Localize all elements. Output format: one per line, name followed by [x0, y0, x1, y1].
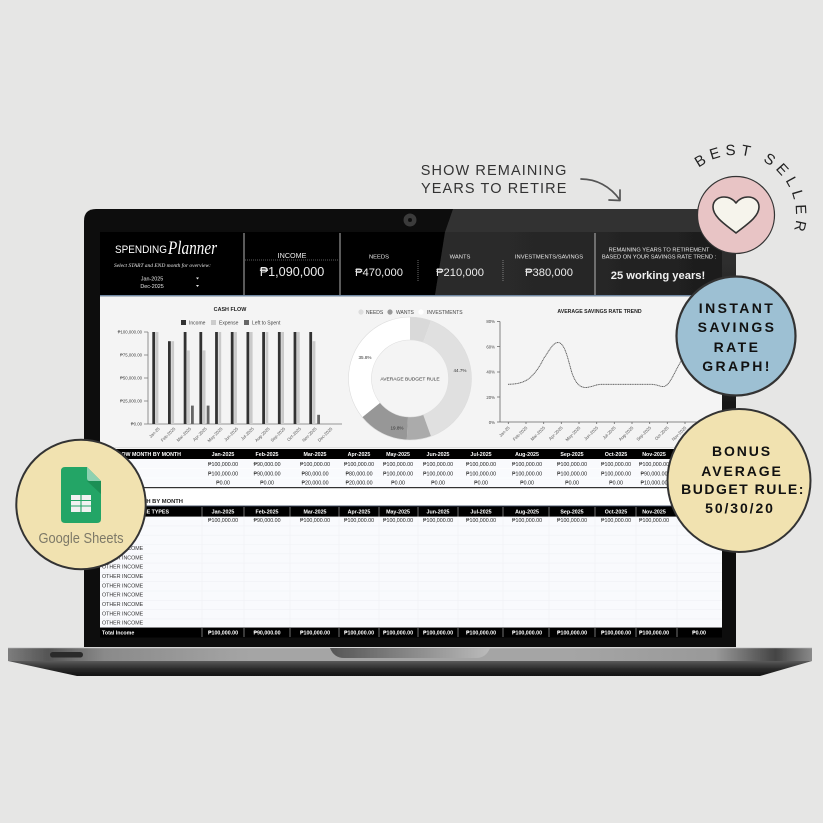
y axis labels: ₱25,000.00 — [120, 398, 143, 404]
table header row: CASH FLOW MONTH BY MONTH — [98, 452, 181, 458]
stat: income: ₱1,090,000 — [260, 265, 324, 279]
badge: instant savings rate graph: INSTANT — [699, 300, 775, 316]
x axis labels: Aug-2025 — [254, 426, 271, 443]
income row: ₱100,000.00 — [639, 462, 669, 468]
stat: investments and savings: INVESTMENTS/SAVINGS — [515, 254, 583, 260]
savings rate line — [508, 340, 694, 388]
first income row: ₱100,000.00 — [208, 518, 238, 524]
laptop lid bezel — [84, 209, 736, 647]
first income row: ₱90,000.00 — [253, 518, 281, 524]
badge: bonus average budget rule — [668, 409, 810, 552]
x axis labels: Jun-2025 — [223, 426, 240, 442]
badge: bonus average budget rule: AVERAGE — [701, 463, 783, 479]
cash flow legend — [181, 320, 281, 326]
stat: wants: ₱210,000 — [436, 267, 484, 279]
y axis labels: ₱100,000.00 — [118, 330, 143, 335]
income row: ₱90,000.00 — [253, 462, 281, 468]
x axis labels: Apr-2025 — [192, 426, 208, 442]
table header row: Jun-2025 — [427, 452, 450, 458]
badge: instant savings rate graph — [676, 276, 796, 396]
total income row: ₱100,000.00 — [512, 630, 542, 636]
badge: bonus average budget rule: BONUS — [712, 443, 772, 459]
badge: best seller — [694, 144, 806, 254]
total income row: ₱100,000.00 — [639, 630, 669, 636]
left to spend row: ₱0.00 — [565, 480, 579, 486]
y axis labels — [486, 319, 495, 425]
x axis labels: Nov-2025 — [301, 426, 318, 443]
badge: bonus average budget rule: BUDGET RULE: — [681, 481, 805, 497]
chart: cash flow — [118, 307, 342, 443]
table header row: May-2025 — [386, 510, 410, 516]
y axis labels: 20% — [486, 395, 495, 400]
x axis labels: Oct-2025 — [654, 425, 670, 441]
icon: google sheets document — [61, 467, 101, 523]
y axis labels: ₱0.00 — [131, 422, 143, 427]
expense row: ₱100,000.00 — [423, 472, 453, 478]
google sheets wordmark: Google Sheets — [38, 531, 124, 547]
table header row: Nov-2025 — [642, 510, 666, 516]
badge: instant savings rate graph: RATE — [714, 339, 760, 355]
x axis labels: Sep-2025 — [635, 425, 653, 442]
table header row: Apr-2025 — [348, 452, 370, 458]
x axis labels: Sep-2025 — [270, 426, 287, 443]
x axis labels: Oct-2025 — [286, 426, 302, 442]
table header row: Mar-2025 — [304, 452, 327, 458]
total income row: ₱100,000.00 — [466, 630, 496, 636]
expense row: ₱80,000.00 — [301, 472, 329, 478]
stat: remaining years to retirement: BASED ON YOUR SAVINGS RATE TREND : — [602, 254, 717, 260]
stat: income: INCOME — [278, 251, 307, 260]
donut labels: 44.7% — [453, 368, 467, 373]
first income row: ₱100,000.00 — [466, 518, 496, 524]
donut legend — [358, 309, 463, 316]
expense row — [208, 472, 668, 478]
table header row: Apr-2025 — [348, 510, 370, 516]
dashboard header bar — [100, 232, 722, 296]
stat: wants: WANTS — [450, 254, 470, 260]
table header row: May-2025 — [386, 452, 410, 458]
total income row: Total Income — [102, 630, 134, 636]
cash flow legend: Income — [189, 320, 206, 326]
stat: remaining years to retirement: 25 working years! — [611, 270, 705, 282]
annotation: show remaining years to retire: SHOW REMAINING — [421, 163, 568, 179]
webcam — [404, 214, 416, 226]
expense row: ₱80,000.00 — [345, 472, 373, 478]
income row: ₱100,000.00 — [300, 462, 330, 468]
left to spend row: ₱0.00 — [474, 480, 488, 486]
stat: needs: NEEDS — [369, 254, 389, 260]
laptop — [8, 209, 812, 676]
x axis labels: Feb-2025 — [512, 425, 529, 442]
date selector: Select START and END month for overview: — [114, 262, 211, 269]
y axis labels: ₱75,000.00 — [120, 352, 143, 358]
other income row labels: OTHER INCOME — [102, 611, 144, 617]
hinge notch — [330, 648, 490, 658]
left to spend row: ₱0.00 — [391, 480, 405, 486]
planner logo: Planner — [167, 238, 217, 259]
chart: average budget rule donut — [348, 309, 472, 440]
other income row labels: OTHER INCOME — [102, 583, 144, 589]
donut labels: 19.8% — [390, 426, 404, 430]
table header row: Jul-2025 — [470, 510, 492, 516]
bezel glass reflection — [445, 209, 736, 647]
other income row labels: OTHER INCOME — [102, 555, 144, 561]
chart: cash flow: CASH FLOW — [214, 307, 247, 313]
total income row: ₱90,000.00 — [253, 630, 281, 636]
income row: ₱100,000.00 — [208, 462, 238, 468]
total income row: ₱100,000.00 — [423, 630, 453, 636]
y axis labels: 80% — [486, 319, 495, 324]
first income row: ₱100,000.00 — [512, 518, 542, 524]
curved best seller text: BEST SELLER — [694, 144, 806, 231]
donut labels: AVERAGE BUDGET RULE — [380, 376, 440, 382]
left to spend row: ₱20,000.00 — [301, 480, 329, 486]
badge: google sheets — [16, 440, 146, 569]
stat: remaining years to retirement — [602, 248, 717, 282]
expense row: ₱90,000.00 — [640, 472, 668, 478]
x axis labels: Dec-2025 — [317, 426, 334, 443]
stat: remaining years to retirement: REMAINING YEARS TO RETIREMENT — [609, 248, 710, 254]
stat: income — [260, 251, 324, 279]
first income row: ₱100,000.00 — [344, 518, 374, 524]
table header row: Jan-2025 — [212, 452, 234, 458]
badge: instant savings rate graph: GRAPH! — [702, 358, 772, 374]
income row: ₱100,000.00 — [601, 462, 631, 468]
expense row: ₱100,000.00 — [383, 472, 413, 478]
income row: ₱100,000.00 — [512, 462, 542, 468]
table header row: Aug-2025 — [515, 510, 539, 516]
x axis labels — [498, 425, 688, 442]
x axis labels: Jul-2025 — [602, 425, 617, 440]
y axis labels — [118, 330, 143, 427]
charts panel — [100, 296, 722, 447]
total income row: ₱100,000.00 — [300, 630, 330, 636]
date selector: Jan-2025 — [141, 276, 163, 282]
badge: bonus average budget rule: 50/30/20 — [705, 500, 775, 516]
y axis labels: 0% — [489, 420, 495, 425]
chart: average savings rate trend — [486, 309, 700, 442]
stat: wants — [436, 254, 484, 279]
x axis labels: May-2025 — [206, 426, 224, 443]
date selector: Dec-2025 — [140, 284, 164, 290]
donut legend: NEEDS — [366, 310, 384, 316]
first income row: ₱100,000.00 — [557, 518, 587, 524]
table header row: Jan-2025 — [212, 510, 234, 516]
other income row labels: OTHER INCOME — [102, 565, 144, 571]
total income row: ₱100,000.00 — [601, 630, 631, 636]
badge: instant savings rate graph: SAVINGS — [698, 319, 776, 335]
planner logo: SPENDING — [115, 244, 167, 256]
expense row: ₱90,000.00 — [253, 472, 281, 478]
donut labels: 35.8% — [358, 355, 372, 360]
icon: heart — [713, 197, 759, 233]
other income row labels: OTHER INCOME — [102, 546, 144, 552]
x axis labels: Jan-25 — [498, 425, 511, 438]
x axis labels: Apr-2025 — [548, 425, 564, 441]
side slot — [50, 652, 83, 658]
expense row: ₱100,000.00 — [512, 472, 542, 478]
header separators — [244, 233, 595, 295]
x axis labels: Jan-25 — [148, 426, 161, 439]
income row: ₱100,000.00 — [466, 462, 496, 468]
first income row: ₱100,000.00 — [383, 518, 413, 524]
stat: needs: ₱470,000 — [355, 267, 403, 279]
left to spend row: ₱0.00 — [431, 480, 445, 486]
x axis labels: Aug-2025 — [618, 425, 635, 442]
arrow: points to retirement panel — [581, 179, 620, 200]
table section title: INCOME MONTH BY MONTH — [105, 499, 183, 505]
table: income month by month — [100, 488, 722, 637]
date selector — [114, 262, 211, 290]
laptop base — [8, 647, 812, 676]
left to spend row — [216, 480, 668, 486]
x axis labels: Mar-2025 — [530, 425, 547, 442]
income row — [208, 462, 669, 468]
table header row: Oct-2025 — [605, 452, 627, 458]
stat: investments and savings — [515, 254, 583, 279]
total income row: ₱100,000.00 — [557, 630, 587, 636]
table header row: Nov-2025 — [642, 452, 666, 458]
x axis labels: Nov-2025 — [671, 425, 688, 442]
table header row: Sep-2025 — [560, 452, 584, 458]
total income row — [102, 630, 706, 636]
income row: ₱100,000.00 — [423, 462, 453, 468]
expense row: ₱100,000.00 — [557, 472, 587, 478]
annotation: show remaining years to retire — [421, 163, 568, 197]
first income row: ₱100,000.00 — [300, 518, 330, 524]
first income row: ₱100,000.00 — [601, 518, 631, 524]
expense bars — [156, 332, 315, 424]
income row: ₱100,000.00 — [383, 462, 413, 468]
other income row labels: OTHER INCOME — [102, 621, 144, 627]
table header row: Oct-2025 — [605, 510, 627, 516]
donut legend: INVESTMENTS — [427, 310, 463, 316]
other income row labels: OTHER INCOME — [102, 593, 144, 599]
table header row: Feb-2025 — [256, 510, 279, 516]
total income row: ₱100,000.00 — [208, 630, 238, 636]
other income row labels — [102, 546, 144, 627]
table header row: Jun-2025 — [427, 510, 450, 516]
x axis labels: Mar-2025 — [176, 426, 193, 443]
first income row: ₱100,000.00 — [423, 518, 453, 524]
table: cash flow month by month — [98, 447, 722, 488]
left to spend row: ₱0.00 — [609, 480, 623, 486]
x axis labels: May-2025 — [564, 425, 582, 442]
total income row: ₱100,000.00 — [344, 630, 374, 636]
cash flow legend: Expense — [219, 320, 239, 326]
planner logo — [115, 238, 217, 259]
x axis labels: Jun-2025 — [583, 425, 600, 441]
table header row: Aug-2025 — [515, 452, 539, 458]
expense row: ₱100,000.00 — [208, 472, 238, 478]
y axis labels: ₱50,000.00 — [120, 376, 143, 380]
income row: ₱100,000.00 — [557, 462, 587, 468]
left to spend row: ₱0.00 — [520, 480, 534, 486]
other income row labels: OTHER INCOME — [102, 602, 144, 608]
total income row: ₱100,000.00 — [383, 630, 413, 636]
table header row: Jul-2025 — [470, 452, 492, 458]
total income row: ₱0.00 — [692, 630, 706, 636]
table header row — [117, 510, 666, 516]
table header row — [98, 452, 666, 458]
chart: average savings rate trend: AVERAGE SAVINGS RATE TREND — [557, 309, 642, 315]
left to spend row: ₱0.00 — [260, 480, 274, 486]
annotation: show remaining years to retire: YEARS TO RETIRE — [421, 181, 568, 197]
x axis labels — [148, 426, 334, 443]
income bars — [152, 332, 312, 424]
y axis labels: 40% — [486, 370, 495, 374]
other income row labels: OTHER INCOME — [102, 574, 144, 580]
expense row: ₱100,000.00 — [601, 472, 631, 478]
donut labels — [358, 355, 467, 430]
first income row: ₱100,000.00 — [639, 518, 669, 524]
stat: needs — [355, 254, 403, 279]
table header row: Mar-2025 — [304, 510, 327, 516]
y axis labels: 60% — [486, 344, 495, 350]
table header row: Feb-2025 — [256, 452, 279, 458]
left to spend row: ₱0.00 — [216, 480, 230, 486]
table header row: Sep-2025 — [560, 510, 584, 516]
stat: investments and savings: ₱380,000 — [525, 267, 573, 279]
x axis labels: Feb-2025 — [160, 426, 177, 443]
income row: ₱100,000.00 — [344, 462, 374, 468]
donut legend: WANTS — [396, 310, 415, 316]
left to spend row: ₱20,000.00 — [345, 480, 373, 486]
left to spend row: ₱10,000.00 — [640, 480, 668, 486]
expense row: ₱100,000.00 — [466, 472, 496, 478]
x axis labels: Jul-2025 — [240, 426, 255, 441]
table header row: ALL INCOME TYPES — [117, 510, 169, 516]
left to spent bars — [191, 406, 320, 424]
cash flow legend: Left to Spent — [252, 320, 281, 326]
first income row — [208, 518, 669, 524]
